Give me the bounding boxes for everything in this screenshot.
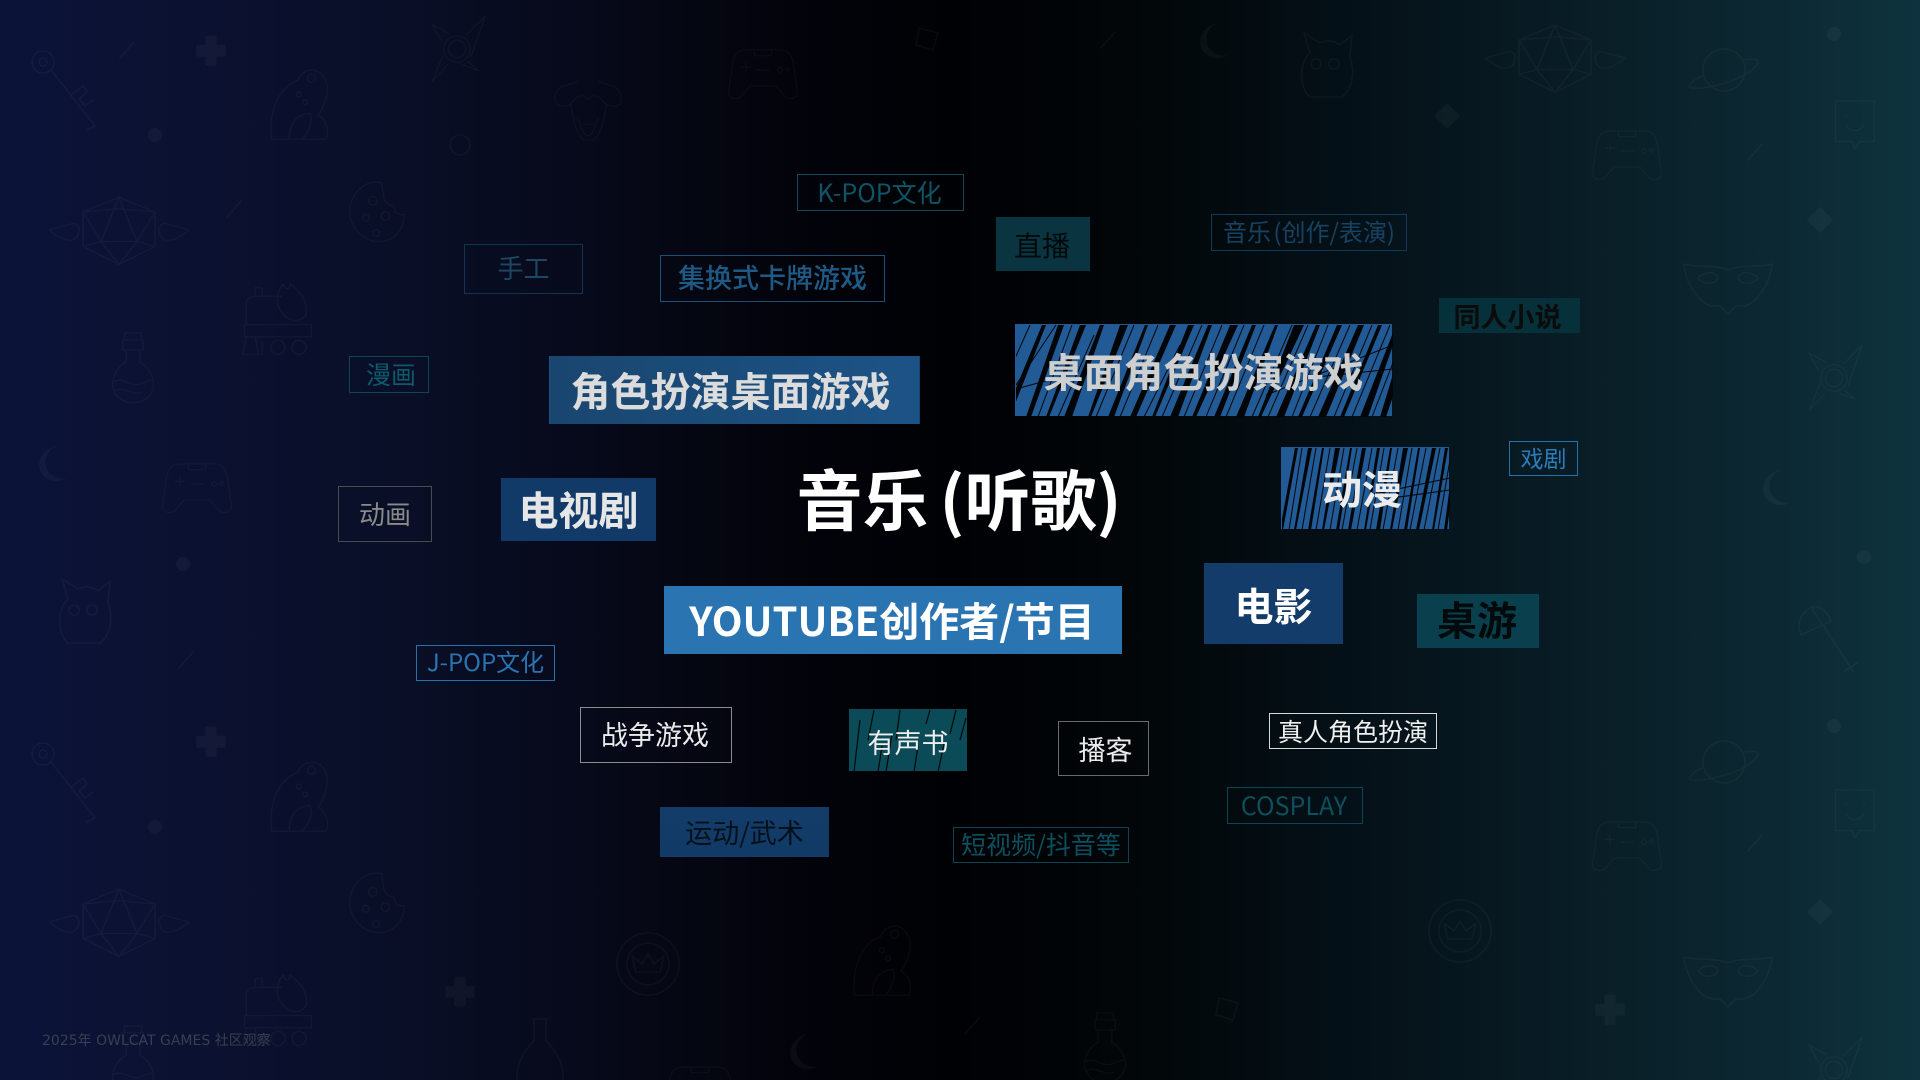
- icon: frog: [271, 70, 327, 139]
- tag: 战争游戏: 战争游戏: [601, 714, 709, 752]
- icon: plus: [198, 37, 224, 64]
- tag: 桌面角色扮演游戏 (scribbled): 桌面角色扮演游戏: [1044, 341, 1364, 399]
- icon: potion lower: [113, 1026, 153, 1080]
- tag: 播客: 播客: [1078, 729, 1132, 768]
- icon: dot: [1827, 719, 1841, 733]
- icon: dot: [148, 128, 162, 142]
- tag: 动画: [338, 486, 432, 542]
- tag: 集换式卡牌游戏: 集换式卡牌游戏: [678, 257, 867, 296]
- icon: wreath: [1429, 900, 1491, 962]
- tag: 直播: 直播: [1014, 225, 1070, 265]
- icon: diamond: [1434, 103, 1460, 129]
- tag: COSPLAY: COSPLAY: [1241, 787, 1347, 823]
- icon: moon: [1763, 470, 1790, 505]
- icon: slash: [179, 652, 193, 668]
- icon: slash: [120, 42, 134, 58]
- icon: chat face: [1836, 101, 1874, 149]
- icon: key lower: [32, 743, 95, 822]
- icon: cookie: [350, 182, 404, 242]
- icon: frog lower: [271, 762, 327, 831]
- icon: slash: [965, 1018, 979, 1034]
- footer source note: 2025年 OWLCAT GAMES 社区观察: [42, 1033, 271, 1049]
- tag: 直播: [996, 217, 1090, 271]
- icon: star: [1809, 1037, 1862, 1080]
- tag: 战争游戏: [580, 707, 732, 763]
- tag: 戏剧: 戏剧: [1520, 440, 1566, 474]
- icon: moon: [790, 1034, 817, 1069]
- icon: key: [32, 51, 95, 130]
- icon: owl: [60, 579, 111, 643]
- icon: potion: [113, 333, 153, 403]
- tag: 动漫 (scribbled): [1281, 447, 1449, 529]
- icon: dot: [1827, 27, 1841, 41]
- tag: 桌游: [1417, 594, 1539, 648]
- icon: winged d20: [1485, 25, 1625, 92]
- icon: slash: [227, 201, 241, 217]
- tag: 同人小说: 同人小说: [1454, 296, 1562, 335]
- icon: owl: [1302, 33, 1353, 97]
- icon: axe: [1799, 607, 1857, 671]
- icon: winged d20: [49, 197, 189, 264]
- icon: winged d20 lower: [49, 889, 189, 956]
- tag: 漫画: [349, 356, 429, 393]
- icon: slash: [1748, 144, 1762, 160]
- tag: 手工: 手工: [497, 249, 550, 286]
- tag: 播客: [1058, 721, 1149, 776]
- icon: diamond: [1807, 207, 1833, 233]
- icon: gamepad top: [728, 50, 798, 98]
- title: 音乐(听歌): 音乐 (听歌): [797, 449, 1121, 545]
- icon: dot lower: [148, 820, 162, 834]
- tag: 有声书 (scribbled): 有声书: [868, 722, 948, 760]
- tag: K-POP文化: K-POP文化: [817, 174, 942, 210]
- tag: 集换式卡牌游戏: [660, 255, 885, 302]
- icon: moon: [1200, 23, 1227, 58]
- icon: ring: [450, 135, 470, 155]
- tag: 动画: 动画: [359, 495, 411, 532]
- icon: moon: [39, 446, 66, 481]
- tag: 有声书 (scribbled): [849, 709, 967, 771]
- icon: frog bottom: [854, 926, 910, 995]
- tag: 运动/武术: 运动/武术: [685, 812, 804, 850]
- icon: flask: [517, 1019, 563, 1080]
- icon: bull: [555, 81, 621, 140]
- tag: 音乐(创作/表演): 音乐 (创作/表演): [1223, 212, 1395, 248]
- tag: 电影: [1204, 563, 1343, 644]
- icon: mask: [1684, 264, 1772, 314]
- icon: planet: [1689, 49, 1758, 91]
- icon: chat face: [1836, 790, 1874, 838]
- tag: J-POP文化: J-POP文化: [427, 643, 544, 678]
- tag: 桌游: 桌游: [1437, 589, 1517, 647]
- icon: star: [1809, 345, 1862, 411]
- icon: potion: [1085, 1013, 1125, 1080]
- icon: star: [432, 16, 485, 82]
- icon: gamepad: [1592, 131, 1662, 179]
- icon: diamond: [1807, 899, 1833, 925]
- icon: cookie lower: [350, 873, 404, 933]
- tag: 电影: 电影: [1234, 577, 1312, 633]
- tag: 角色扮演桌面游戏: 角色扮演桌面游戏: [570, 360, 890, 418]
- icon: dot: [1857, 550, 1871, 564]
- icon: plus: [1597, 996, 1623, 1023]
- tag: 动漫 (scribbled): 动漫: [1322, 458, 1402, 516]
- icon: plus lower: [198, 728, 224, 755]
- icon: slash: [1748, 835, 1762, 851]
- tag: 运动/武术: [660, 807, 829, 857]
- icon: square: [1216, 998, 1238, 1020]
- tag: 电视剧: 电视剧: [518, 478, 638, 536]
- icon: gamepad: [162, 464, 232, 512]
- tag: 戏剧: [1509, 441, 1578, 476]
- tag: YOUTUBE创作者/节目: YOUTUBE创作者/节目: [689, 590, 1095, 648]
- tag: 桌面角色扮演游戏 (scribbled): [1015, 324, 1392, 416]
- tag: 手工: [464, 244, 583, 294]
- icon: plus: [447, 978, 473, 1005]
- icon: planet: [1689, 741, 1758, 783]
- icon: slash: [1101, 32, 1115, 48]
- icon: mask: [1684, 957, 1772, 1007]
- icon: gamepad bottom: [665, 1067, 735, 1080]
- icon: wreath: [617, 933, 679, 995]
- icon: train: [243, 284, 311, 354]
- icon: dot middle: [176, 557, 190, 571]
- tag: 真人角色扮演: 真人角色扮演: [1278, 712, 1428, 748]
- icon: gamepad: [1592, 822, 1662, 870]
- tag: 漫画: 漫画: [366, 356, 416, 392]
- icon: train lower: [243, 975, 311, 1045]
- icon: square: [916, 28, 938, 50]
- tag: 短视频/抖音等: 短视频/抖音等: [961, 826, 1121, 862]
